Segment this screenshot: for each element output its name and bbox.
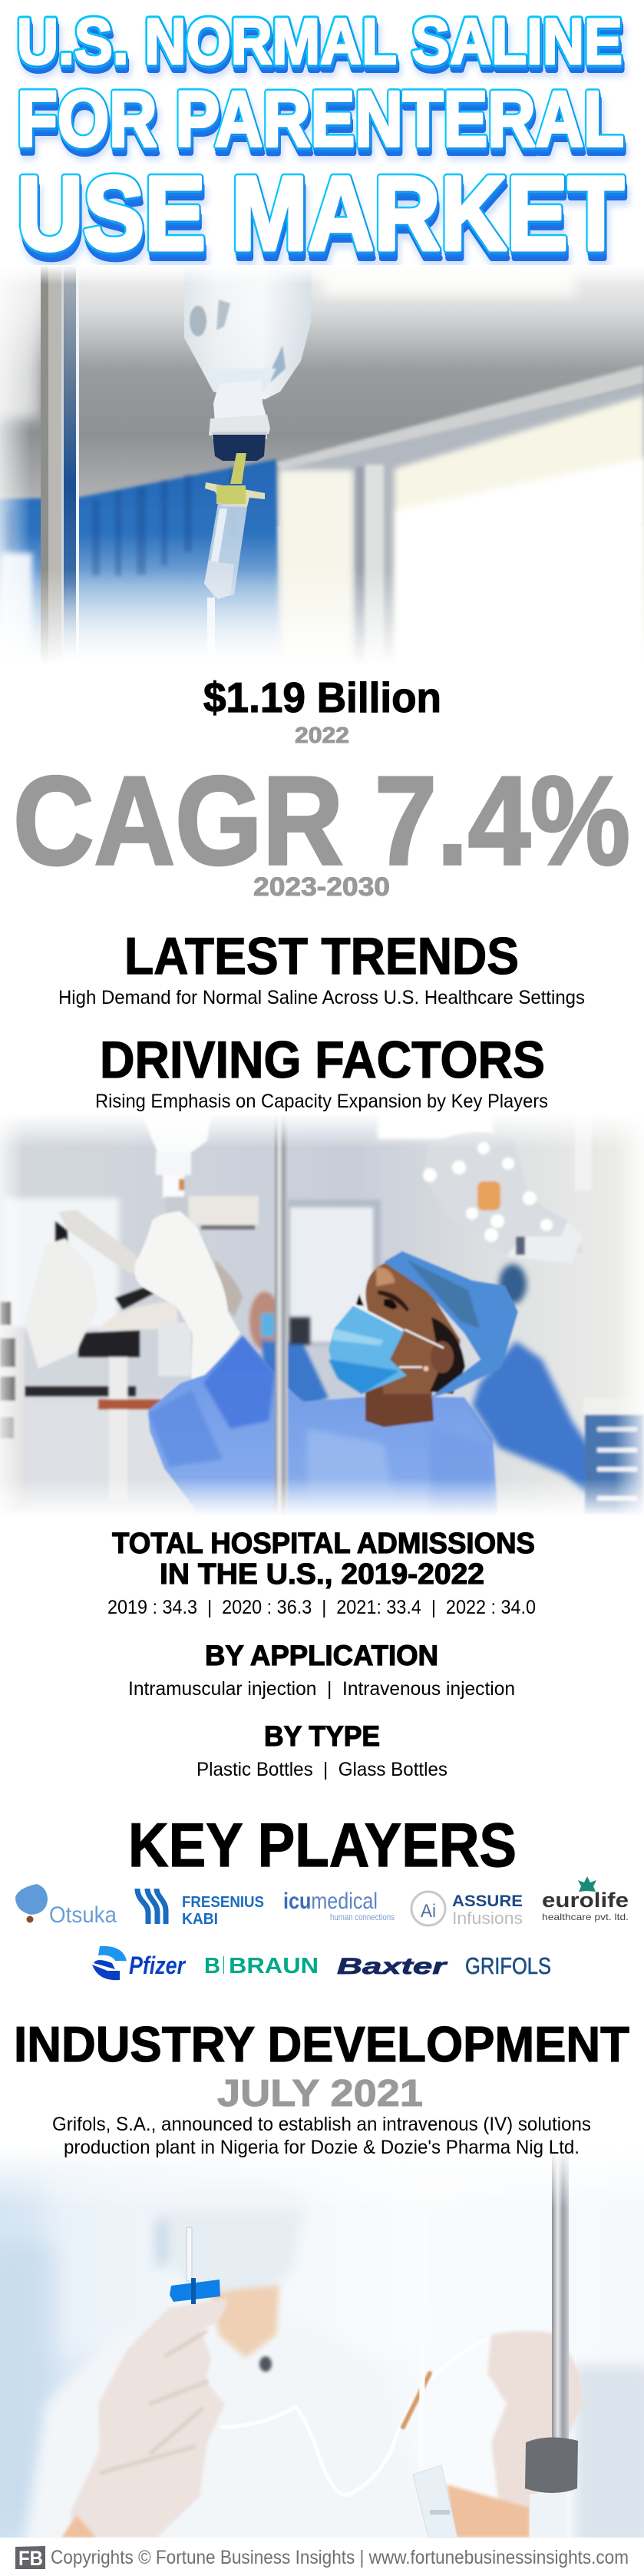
footer logo: FB xyxy=(18,2547,43,2570)
key player logos xyxy=(15,1876,629,1980)
second staff member xyxy=(472,1264,596,1494)
lower skin xyxy=(61,2485,530,2538)
bottom fade xyxy=(0,1478,644,1517)
logo: Assure Infusions: Ai xyxy=(421,1901,436,1922)
equipment arm xyxy=(25,1210,191,1500)
logo: Eurolife: healthcare pvt. ltd. xyxy=(542,1912,629,1922)
drip chamber bottom xyxy=(413,2465,457,2538)
heading: industry development: INDUSTRY DEVELOPMENT xyxy=(14,2016,629,2072)
right fade xyxy=(614,1114,644,1528)
left wall highlight xyxy=(0,265,38,419)
ceiling highlight xyxy=(322,276,577,300)
right hand xyxy=(487,2331,583,2511)
pole xyxy=(275,1110,288,1521)
heading: latest trends: LATEST TRENDS xyxy=(124,927,519,985)
logo: ICU Medical: human connections xyxy=(330,1912,395,1922)
development date: JULY 2021 xyxy=(217,2073,423,2114)
application segments: Intramuscular injection | Intravenous injection xyxy=(128,1678,515,1700)
IV pole xyxy=(41,265,79,664)
shelving xyxy=(0,1302,25,1503)
heading: total hospital admissions: IN THE U.S., 2019-2022 xyxy=(160,1558,484,1591)
logo: Pfizer: Pfizer xyxy=(129,1952,186,1979)
logo: Eurolife xyxy=(542,1876,629,1922)
yellow spike and wings xyxy=(205,453,265,507)
logo: Fresenius Kabi: FRESENIUS xyxy=(182,1894,264,1911)
logo: Assure Infusions: Infusions xyxy=(452,1909,523,1928)
drip chamber top xyxy=(414,2174,468,2206)
surgical mask xyxy=(329,1304,444,1394)
development description xyxy=(52,2114,591,2158)
nurse neck and face xyxy=(355,1263,465,1427)
IV bottle xyxy=(146,1120,210,1214)
drip chamber xyxy=(204,503,247,599)
window frame and molding xyxy=(276,365,644,668)
IV tube xyxy=(223,2218,485,2495)
logo: Otsuka xyxy=(15,1884,117,1928)
heading: total hospital admissions xyxy=(112,1528,535,1591)
door xyxy=(286,1200,381,1346)
logo: B. Braun: B xyxy=(204,1954,220,1978)
logo: Grifols: GRIFOLS xyxy=(465,1952,551,1979)
logo: Fresenius Kabi xyxy=(137,1889,264,1928)
logo: ICU Medical: icumedical xyxy=(283,1889,378,1914)
IV pole and grip xyxy=(525,2151,578,2540)
footer xyxy=(0,2538,644,2576)
base year: 2022 xyxy=(295,723,349,748)
logo: Eurolife: eurolife xyxy=(542,1889,629,1912)
glove hand xyxy=(134,1211,240,1383)
top fade xyxy=(0,1114,644,1148)
logo: Baxter: Baxter xyxy=(337,1954,449,1979)
driving factors text: Rising Emphasis on Capacity Expansion by Key Players xyxy=(95,1091,548,1112)
heading: by type: BY TYPE xyxy=(264,1720,380,1752)
white coat xyxy=(25,1238,98,1369)
type segments: Plastic Bottles | Glass Bottles xyxy=(197,1759,447,1780)
surgical cap xyxy=(384,1251,518,1398)
air conditioner xyxy=(189,1196,259,1230)
surgical lamp xyxy=(378,1110,592,1263)
colleague in background xyxy=(249,1292,329,1406)
logo: Pfizer xyxy=(92,1946,186,1980)
market size value: $1.19 Billion xyxy=(203,674,441,721)
ceiling xyxy=(0,265,644,526)
curtain xyxy=(0,458,280,648)
gown xyxy=(148,1336,499,1532)
heading: driving factors: DRIVING FACTORS xyxy=(100,1031,545,1089)
white coat xyxy=(23,2312,438,2550)
blurred head cap and mask xyxy=(154,2170,307,2304)
glove finger shadows xyxy=(100,2331,209,2473)
logo: Assure Infusions xyxy=(411,1892,523,1928)
admissions data by year: 2019 : 34.3 | 2020 : 36.3 | 2021: 33.4 | 2022 : 34.0 xyxy=(107,1597,536,1618)
heading: key players: KEY PLAYERS xyxy=(128,1811,517,1880)
blurred pendant xyxy=(259,2356,272,2372)
development description: Grifols, S.A., announced to establish an intravenous (IV) solutions xyxy=(52,2114,591,2135)
drip cap xyxy=(213,435,266,461)
photo: IV drip bag by a window xyxy=(0,265,644,672)
left fade xyxy=(0,1114,23,1528)
logo: B. Braun: BRAUN xyxy=(229,1954,319,1978)
heading: total hospital admissions: TOTAL HOSPITAL ADMISSIONS xyxy=(112,1528,535,1560)
forecast period: 2023-2030 xyxy=(253,872,390,902)
blurred background xyxy=(0,2147,644,2538)
butterfly needle xyxy=(170,2227,220,2304)
heading: by application: BY APPLICATION xyxy=(205,1640,438,1671)
latest trends text: High Demand for Normal Saline Across U.S. Healthcare Settings xyxy=(58,987,585,1008)
IV bag xyxy=(184,265,312,439)
blurred neck xyxy=(210,2285,279,2358)
floor xyxy=(27,1399,183,1496)
bottom fade xyxy=(0,568,644,664)
photo: gloved hand holding butterfly needle xyxy=(0,2147,644,2550)
IV tube xyxy=(207,598,215,642)
top fade xyxy=(0,2147,644,2208)
wall xyxy=(0,1110,644,1532)
photo contents xyxy=(0,1110,644,1532)
title xyxy=(17,5,627,286)
left window xyxy=(4,1198,119,1329)
development description: production plant in Nigeria for Dozie & Dozie's Pharma Nig Ltd. xyxy=(64,2137,580,2158)
photo: nurse adjusting IV drip xyxy=(0,1110,644,1532)
glove hand xyxy=(71,2298,227,2538)
logo: Otsuka: Otsuka xyxy=(49,1902,117,1928)
logo: Assure Infusions: ASSURE xyxy=(452,1892,523,1910)
bottom fade solid edge xyxy=(0,1517,637,1525)
glove thumb shadow xyxy=(215,1260,243,1317)
counter and cabinet xyxy=(583,1398,644,1515)
logo: Fresenius Kabi: KABI xyxy=(182,1911,218,1928)
